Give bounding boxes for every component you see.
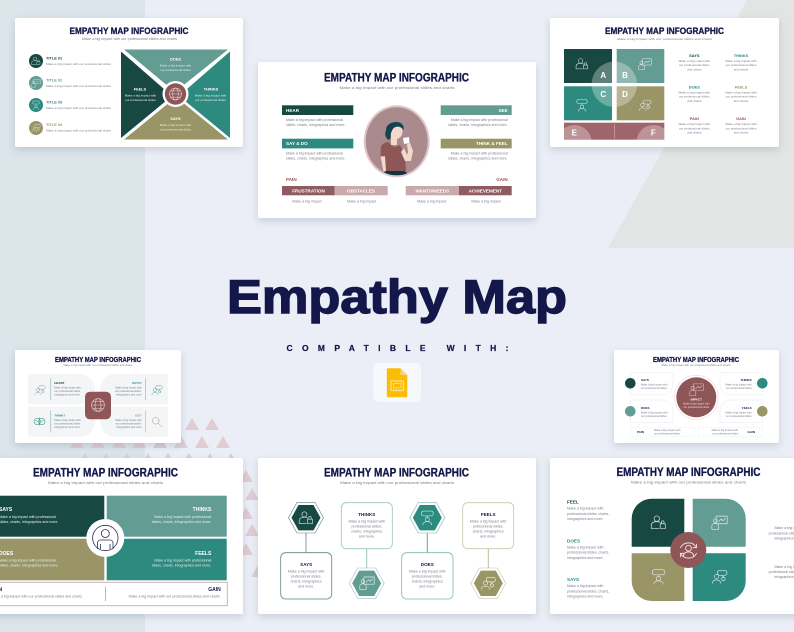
says box: charts, infographics	[291, 580, 322, 584]
X diagram: Make a big impact with	[125, 94, 157, 98]
hexagon: does	[410, 502, 445, 533]
six text blocks: and charts	[734, 131, 749, 135]
panel: four corner slide with centre square	[15, 350, 181, 443]
X diagram: THINKS	[204, 86, 219, 92]
centre circle	[674, 375, 718, 419]
six text blocks: and charts	[734, 99, 749, 103]
compatible with label: COMPATIBLE WITH:	[286, 343, 509, 353]
list of titles: Make a big impact with our professional slides	[46, 84, 111, 88]
grid diagram: E	[572, 128, 578, 138]
think and feel block: Make a big impact with professional	[451, 151, 508, 155]
quadrant text: our professional slides,	[54, 422, 81, 426]
box text: our professional slides	[641, 386, 668, 390]
feels box	[463, 503, 514, 549]
left text: DOES	[567, 538, 580, 543]
pain and gain bars: Make a big impact	[292, 200, 322, 204]
colour blocks: THINKS	[193, 507, 212, 513]
colour blocks: slides, charts, infographics and more.	[152, 520, 211, 524]
box text: SAYS	[641, 378, 649, 382]
hear block	[282, 105, 353, 127]
six text blocks: SAYS	[689, 53, 700, 58]
pain and gain labels: GAIN	[496, 177, 508, 182]
see block: SEE	[498, 108, 508, 113]
connector lines	[306, 533, 488, 568]
says box: and more.	[298, 584, 314, 588]
see block: Make a big impact with professional	[451, 118, 508, 122]
right text	[769, 518, 794, 579]
panel: hexagon slide	[258, 458, 536, 614]
say and do block: slides, charts, infographics and more.	[286, 156, 346, 160]
does box: charts, infographics	[412, 580, 443, 584]
panel: central circle slide	[614, 350, 779, 443]
X diagram: our professional slides	[195, 98, 226, 102]
six text blocks: THINKS	[734, 53, 749, 58]
colour blocks: slides, charts, infographics and more.	[152, 564, 211, 568]
hear block: slides, charts, infographics and more.	[286, 123, 346, 127]
colour blocks: FEELS	[195, 551, 212, 557]
six text blocks: our professional slides	[726, 126, 757, 130]
quadrant text: Make a big impact with	[54, 386, 81, 390]
thinks box: and more.	[359, 535, 375, 539]
X diagram: our professional slides	[160, 128, 191, 132]
triangle pattern	[70, 418, 265, 577]
pain and gain box: GAIN	[208, 587, 221, 593]
think and feel block: THINK & FEEL	[476, 141, 508, 146]
pain and gain labels: PAIN	[286, 177, 297, 182]
left text: infographics and more.	[567, 594, 604, 598]
outlined boxes	[631, 372, 763, 437]
pain and gain bars: ACHIEVEMENT	[469, 188, 502, 193]
quadrants	[632, 499, 746, 601]
thinks box: THINKS	[358, 512, 375, 517]
quadrant text: infographics and more	[116, 425, 142, 429]
quadrant text: SAYS?	[132, 381, 142, 385]
quadrants	[28, 374, 168, 437]
pain and gain bars: Make a big impact	[347, 200, 376, 204]
left text: FEEL	[567, 500, 579, 504]
six text blocks: our professional slides	[679, 63, 710, 67]
pain and gain bars: WANTS/NEEDS	[415, 188, 449, 193]
side circles	[625, 378, 768, 417]
left text: professional slides, charts,	[567, 551, 609, 555]
thinks box: Make a big impact with	[349, 520, 385, 524]
heading: EMPATHY MAP INFOGRAPHIC	[605, 26, 724, 37]
X diagram: SAYS	[170, 116, 181, 121]
X diagram: our professional slides	[160, 68, 191, 72]
X diagram: Make a big impact with	[160, 64, 192, 68]
list of titles: TITLE 04	[46, 122, 63, 127]
six text blocks: FEELS	[735, 84, 748, 89]
main title: Empathy Map	[227, 270, 567, 323]
box text: THINKS	[741, 378, 752, 382]
left text: professional slides, charts,	[567, 589, 609, 593]
list of titles	[29, 54, 111, 135]
quadrant text: infographics and more	[116, 392, 142, 396]
subtitle: Make a big impact with our professional slides and charts	[64, 363, 133, 367]
quadrant text: infographics and more	[54, 392, 81, 396]
six text blocks: and charts	[687, 131, 702, 135]
left text: infographics and more.	[567, 517, 604, 521]
box text: our professional slides	[726, 414, 752, 418]
quadrant text: Make a big impact with	[115, 418, 142, 422]
six text blocks: Make a big impact with	[679, 122, 710, 126]
icon: slides app	[373, 363, 421, 402]
box text: Make a big impact with	[725, 382, 752, 386]
pain and gain box	[0, 582, 227, 606]
says box: Make a big impact with	[288, 570, 324, 574]
heading: EMPATHY MAP INFOGRAPHIC	[70, 26, 189, 37]
subtitle: Make a big impact with our professional slides and charts	[48, 480, 163, 485]
heading: EMPATHY MAP INFOGRAPHIC	[616, 467, 760, 479]
heading: EMPATHY MAP INFOGRAPHIC	[324, 468, 469, 480]
heading: EMPATHY MAP INFOGRAPHIC	[33, 468, 178, 480]
thinks box: charts, infographics	[351, 530, 383, 534]
pain and gain bars: Make a big impact	[471, 200, 501, 204]
see block: slides, charts, infographics and more.	[448, 123, 508, 127]
hexagon: thinks	[349, 568, 384, 599]
does box	[402, 553, 453, 599]
quadrant text: our professional slides,	[115, 389, 142, 393]
list of titles: Make a big impact with our professional slides	[46, 106, 111, 110]
six text blocks: DOES	[689, 84, 700, 89]
six text blocks: our professional slides	[726, 95, 757, 99]
say and do block: SAY & DO	[286, 141, 308, 146]
left text: Make a big impact with	[567, 584, 604, 588]
quadrant text: our professional slides,	[54, 389, 81, 393]
box text: GAIN	[748, 430, 755, 434]
feels box: FEELS	[481, 512, 496, 517]
grid diagram: C	[600, 90, 606, 99]
box text	[637, 378, 755, 436]
six text blocks: Make a big impact with	[725, 122, 757, 126]
six text blocks: GAIN	[736, 116, 746, 121]
left text: Make a big impact with	[567, 545, 604, 549]
six text blocks: Make a big impact with	[679, 59, 710, 63]
box text: Make a big impact with	[654, 428, 681, 432]
thinks box: professional slides,	[352, 525, 382, 529]
subtitle: Make a big impact with our professional slides and charts	[340, 480, 454, 485]
thinks box	[341, 503, 392, 549]
X diagram: Make a big impact with	[160, 123, 192, 127]
quadrant text: infographics and more	[54, 425, 81, 429]
say and do block	[282, 139, 353, 160]
quadrant text: THINK?	[54, 414, 65, 418]
subtitle: Make a big impact with our professional slides and charts	[340, 85, 454, 90]
hear block: Make a big impact with professional	[286, 118, 343, 122]
six text blocks	[679, 53, 757, 135]
does box: DOES	[421, 562, 434, 567]
feels box: and more.	[480, 535, 496, 539]
left text: professional slides, charts,	[567, 512, 609, 516]
list of titles: TITLE 03	[46, 100, 63, 104]
heading: EMPATHY MAP INFOGRAPHIC	[324, 72, 469, 84]
six text blocks: and charts	[687, 99, 702, 103]
left text: Make a big impact with	[567, 506, 604, 510]
says box	[281, 553, 332, 599]
see block	[441, 105, 512, 127]
subtitle: Make a big impact with our professional slides and charts	[617, 37, 713, 41]
feels box: charts, infographics	[473, 530, 504, 534]
think and feel block: slides, charts, infographics and more.	[448, 156, 508, 160]
centre circle: our professional slides	[683, 405, 710, 409]
panel: woman portrait slide	[258, 62, 536, 218]
colour blocks: Make a big impact with professional	[154, 515, 211, 519]
colour blocks: slides, charts, infographics and more.	[0, 564, 59, 568]
box text: DOES	[641, 406, 650, 410]
icon: person in circle	[86, 519, 124, 557]
box text: our professional slides	[654, 432, 681, 436]
six text blocks: our professional slides	[726, 63, 757, 67]
pain and gain box: Make a big impact with our professional slides and charts.	[129, 594, 221, 598]
box text: our professional slides	[641, 414, 668, 418]
colour blocks: Make a big impact with professional	[0, 515, 56, 519]
box text: Make a big impact with	[712, 428, 739, 432]
X diagram: our professional slides	[125, 98, 156, 102]
colour blocks: slides, charts, infographics and more.	[0, 520, 59, 524]
hear block: HEAR	[286, 108, 300, 113]
six text blocks: and charts	[687, 68, 702, 72]
heading: EMPATHY MAP INFOGRAPHIC	[653, 355, 739, 364]
six text blocks: Make a big impact with	[679, 90, 710, 94]
say and do block: Make a big impact with professional	[286, 151, 343, 155]
grid diagram	[564, 49, 664, 140]
left text: infographics and more.	[567, 556, 604, 560]
panel: four block slide cropped left	[0, 458, 243, 614]
feels box: Make a big impact with	[470, 520, 506, 524]
quadrant text: DO?	[135, 414, 142, 418]
X diagram	[121, 50, 230, 140]
feels box: professional slides,	[473, 525, 503, 529]
centre circle: IMPACT	[691, 398, 702, 402]
woman illustration	[364, 105, 430, 179]
six text blocks: our professional slides	[679, 126, 710, 130]
six text blocks: Make a big impact with	[725, 59, 757, 63]
pain and gain bars: Make a big impact	[417, 200, 446, 204]
left text	[567, 500, 609, 598]
list of titles: TITLE 01	[46, 56, 63, 60]
X diagram: DOES	[170, 56, 181, 62]
think and feel block	[441, 139, 512, 160]
grid diagram: F	[651, 128, 656, 138]
six text blocks: Make a big impact with	[725, 90, 757, 94]
subtitle: Make a big impact with our professional slides and charts	[82, 37, 177, 41]
colour blocks: Make a big impact with professional	[0, 558, 56, 562]
six text blocks: our professional slides	[679, 95, 710, 99]
box text: our professional slides	[712, 432, 739, 436]
six text blocks: and charts	[734, 68, 749, 72]
quadrant text: HEART	[54, 381, 65, 385]
colour blocks	[0, 496, 227, 580]
quadrant text: Make a big impact with	[54, 418, 81, 422]
subtitle: Make a big impact with our professional slides and charts	[662, 363, 731, 367]
box text: our professional slides	[726, 386, 752, 390]
does box: and more.	[419, 584, 435, 588]
grid diagram: A	[600, 71, 606, 80]
box text: PAIN	[637, 430, 644, 434]
centre square	[85, 392, 111, 419]
X diagram: FEELS	[134, 86, 147, 92]
subtitle: Make a big impact with our professional slides and charts	[631, 480, 746, 484]
list of titles: TITLE 02	[46, 78, 63, 82]
colour blocks: Make a big impact with professional	[154, 558, 211, 562]
centre circle: Make a big impact with	[683, 402, 710, 406]
does box: Make a big impact with	[409, 570, 446, 574]
quadrant text: our professional slides,	[115, 422, 142, 426]
pain and gain bars: FRUSTRATION	[292, 188, 325, 193]
pain and gain bars: OBSTACLES	[347, 188, 375, 193]
grid diagram: B	[622, 71, 628, 80]
says box: SAYS	[300, 562, 312, 567]
heading: EMPATHY MAP INFOGRAPHIC	[55, 355, 141, 364]
six text blocks: PAIN	[690, 116, 699, 121]
panel: X-shaped map slide	[15, 18, 243, 147]
quadrant text: Make a big impact with	[115, 386, 142, 390]
grid diagram: D	[622, 90, 628, 99]
box text: Make a big impact with	[641, 382, 668, 386]
says box: professional slides,	[291, 574, 321, 578]
hexagon: feels	[471, 568, 506, 599]
panel: lettered grid slide	[550, 18, 779, 159]
box text: FEELS	[742, 406, 752, 410]
hexagon: says	[288, 502, 324, 533]
box text: Make a big impact with	[641, 410, 668, 414]
quadrant icons	[34, 386, 162, 427]
panel: rounded quadrant slide cropped right	[550, 458, 794, 614]
box text: Make a big impact with	[725, 410, 752, 414]
list of titles: Make a big impact with our professional slides	[46, 128, 111, 132]
pain and gain bars	[282, 186, 512, 204]
does box: professional slides,	[412, 574, 443, 578]
quadrant text	[54, 381, 142, 429]
pain and gain labels	[286, 177, 508, 182]
list of titles: Make a big impact with our professional slides	[46, 62, 111, 66]
left text: SAYS	[567, 577, 579, 582]
X diagram: Make a big impact with	[195, 94, 227, 98]
